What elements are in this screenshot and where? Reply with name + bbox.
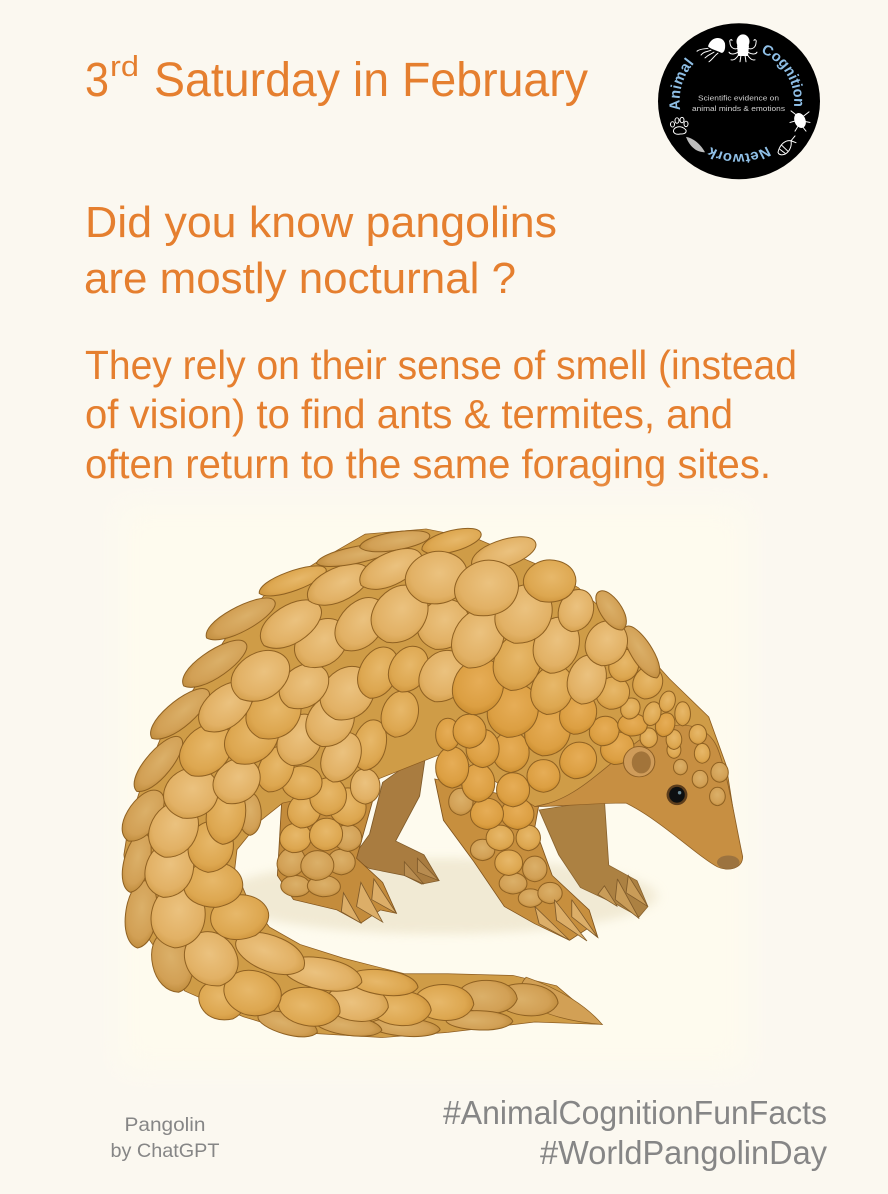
ground shadow [222, 858, 657, 934]
fact text: of vision) to find ants & termites, and [85, 391, 733, 437]
icon: beetle [790, 111, 810, 131]
question text [84, 198, 557, 303]
ear [623, 747, 655, 777]
logo tagline [692, 93, 785, 113]
shoulder scales [444, 553, 677, 781]
icon: jellyfish [697, 38, 725, 62]
rump scales [113, 731, 280, 950]
illustration: watercolor paper wash [118, 505, 748, 1070]
logo ring text: Network: Network [707, 146, 771, 163]
icon: fish [778, 136, 796, 155]
heading: date: rd [110, 51, 139, 83]
body silhouette with tail [124, 529, 735, 1038]
logo: Animal Cognition Network [658, 23, 820, 180]
icon: octopus [729, 34, 757, 62]
fact text: They rely on their sense of smell (instead [85, 342, 797, 388]
heading: date: 3 [85, 54, 109, 107]
logo ring text: Cognition: Cognition [762, 45, 803, 106]
image credit [110, 1114, 220, 1162]
head scales [640, 702, 728, 806]
image credit: by ChatGPT [110, 1140, 220, 1162]
hashtags: #WorldPangolinDay [540, 1134, 827, 1171]
near front leg [435, 779, 598, 940]
claws: hind foot [341, 858, 439, 923]
question text: Did you know pangolins [85, 198, 557, 247]
icon: feather [686, 137, 705, 152]
logo tagline: Scientific evidence on [698, 93, 779, 102]
icon: paw [670, 117, 688, 134]
hashtags: #AnimalCognitionFunFacts [443, 1094, 827, 1131]
head and neck [535, 725, 743, 869]
hind leg scales [274, 763, 380, 899]
tail scales [146, 923, 602, 1042]
logo tagline: animal minds & emotions [692, 104, 785, 113]
fact text [85, 342, 797, 487]
logo ring text: Animal: Animal [669, 57, 694, 110]
near hind leg [277, 765, 397, 923]
claws: front foot [535, 875, 648, 941]
eye [667, 784, 687, 805]
front leg scales [436, 714, 562, 907]
fact text: often return to the same foraging sites. [85, 441, 771, 487]
heading: date: Saturday in February [154, 54, 588, 107]
question text: are mostly nocturnal ? [84, 254, 516, 303]
back scales [141, 523, 542, 809]
illustration: pangolin [113, 523, 743, 1042]
far hind leg [352, 751, 439, 884]
image credit: Pangolin [124, 1114, 206, 1136]
far front leg [539, 800, 648, 917]
hashtags [443, 1094, 827, 1171]
nose [717, 855, 740, 869]
